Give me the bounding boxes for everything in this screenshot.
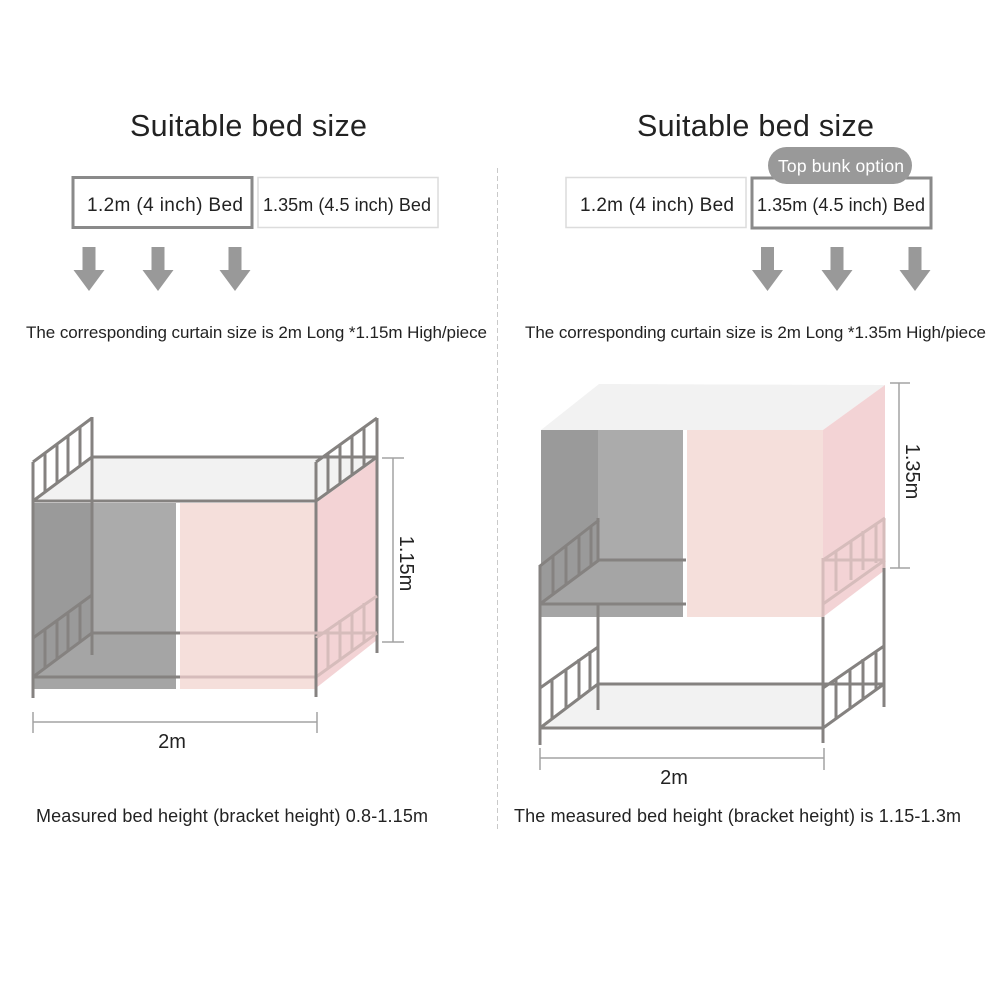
dimension: 2m width: 2m — [660, 767, 688, 789]
heading: left: Suitable bed size — [130, 109, 367, 143]
diagram: bunk bed with 1.35m curtain — [540, 384, 885, 745]
panel: left 1.2m bed option — [26, 109, 487, 826]
icon: down arrows — [752, 247, 930, 291]
caption: curtain size: The corresponding curtain size is 2m Long *1.35m High/piece — [525, 323, 986, 342]
note: measured bed height: Measured bed height (bracket height) 0.8-1.15m — [36, 806, 428, 826]
icon: down arrows — [74, 247, 250, 291]
caption: curtain size: The corresponding curtain size is 2m Long *1.15m High/piece — [26, 323, 487, 342]
dimension: 1.35m height: 1.35m — [901, 444, 923, 499]
dimension: 1.15m height: 1.15m — [395, 536, 417, 591]
badge: top bunk option — [768, 147, 912, 184]
selected option: 1.2m bed: 1.2m (4 inch) Bed — [87, 195, 243, 216]
option: 1.35m bed — [258, 178, 438, 228]
selected option: 1.2m bed — [73, 178, 252, 228]
option: 1.2m bed: 1.2m (4 inch) Bed — [580, 195, 734, 216]
heading: right: Suitable bed size — [637, 109, 874, 143]
option: 1.2m bed — [566, 178, 746, 228]
dimension: 1.15m height — [382, 458, 417, 642]
badge: top bunk option: Top bunk option — [778, 156, 904, 176]
dimension: 2m width: 2m — [158, 731, 186, 753]
selected option: 1.35m bed: 1.35m (4.5 inch) Bed — [757, 195, 925, 215]
selected option: 1.35m bed — [752, 178, 931, 228]
option: 1.35m bed: 1.35m (4.5 inch) Bed — [263, 195, 431, 215]
dimension: 2m width — [540, 748, 824, 789]
panel: right 1.35m bed option — [514, 109, 986, 826]
note: measured bed height: The measured bed height (bracket height) is 1.15-1.3m — [514, 806, 961, 826]
dimension: 2m width — [33, 712, 317, 753]
diagram: bed with 1.15m curtain — [33, 417, 377, 698]
dimension: 1.35m height — [890, 383, 923, 568]
